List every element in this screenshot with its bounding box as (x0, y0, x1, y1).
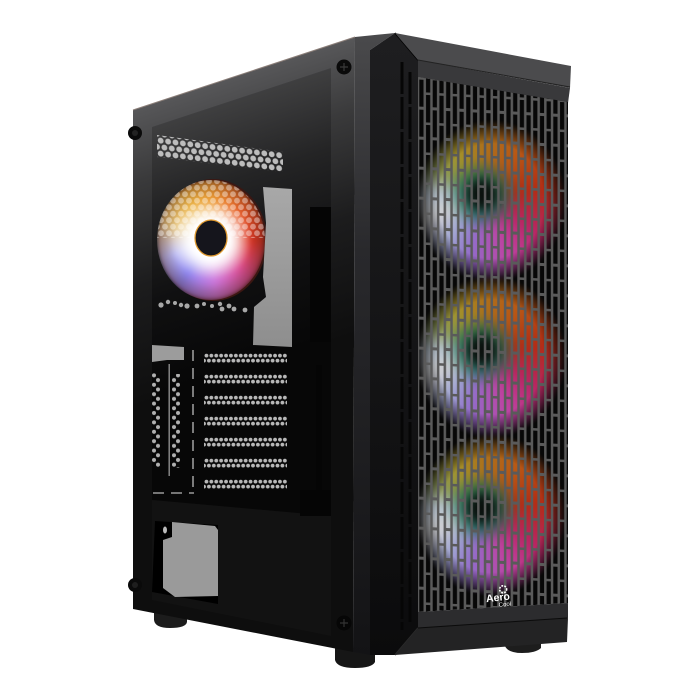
RGB fan glow: three front fans (415, 116, 571, 602)
front fan top (419, 122, 564, 281)
logo sub wordmark: Cool (499, 602, 511, 609)
front mesh backing (418, 77, 568, 612)
foot: rear left (154, 612, 187, 628)
foot: front right (505, 640, 541, 653)
side glass panel (133, 37, 355, 652)
dashed bracket edge (153, 350, 194, 493)
lower glass tint (152, 500, 331, 636)
front dark strip (370, 33, 418, 655)
front bottom cap (395, 618, 568, 655)
front fan middle (419, 278, 564, 437)
screw: bottom right (336, 616, 352, 630)
brand logo (485, 585, 511, 610)
rear fan rim (159, 179, 267, 301)
front lower band (395, 603, 568, 655)
screw: top right (336, 60, 352, 74)
rear bracket plate (152, 345, 184, 362)
logo fan icon (499, 585, 507, 593)
power supply opening (152, 521, 218, 604)
row of holes below fan (158, 300, 247, 312)
gray backplate cut-out (253, 187, 292, 347)
foot: front left (335, 648, 375, 668)
front perforated mesh (418, 77, 568, 612)
corner pillar (353, 33, 395, 655)
vertical interior bars (300, 207, 331, 516)
power supply screw hole (163, 526, 167, 534)
rear fan hub (195, 220, 227, 256)
power supply plate (163, 522, 218, 597)
front top cap (395, 33, 571, 103)
rear RGB fan (157, 178, 265, 300)
top bevel edge (395, 33, 418, 60)
perforated slot rows (204, 353, 287, 490)
top hexagonal vent (157, 135, 283, 172)
glass top edge highlight (133, 37, 355, 110)
front upper band (418, 60, 570, 103)
expansion vent strip left (152, 373, 160, 467)
front fan bottom (419, 436, 564, 595)
screw: top left (128, 126, 142, 140)
bottom bevel edge (395, 628, 418, 655)
logo wordmark: Aero (485, 591, 510, 605)
screw: bottom left (128, 578, 142, 592)
bevel vent column (402, 62, 410, 630)
interior of case (152, 68, 331, 516)
expansion vent strip right (172, 374, 180, 468)
expansion divider line (168, 364, 170, 476)
